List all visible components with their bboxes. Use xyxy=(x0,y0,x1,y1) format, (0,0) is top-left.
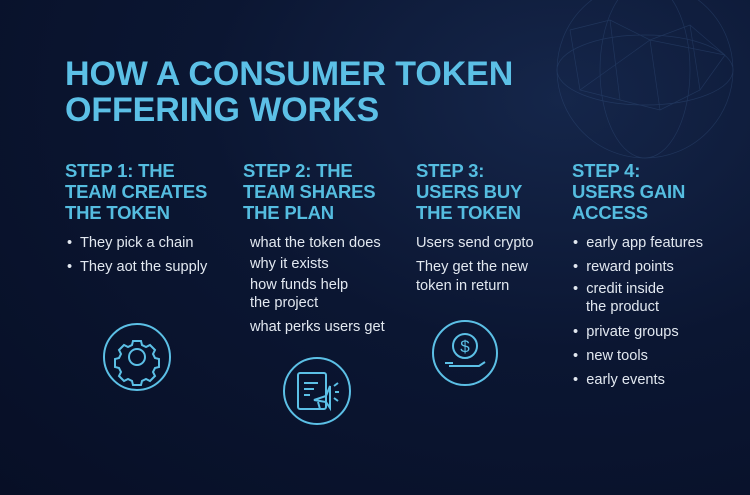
list: step 4: the product xyxy=(586,299,659,315)
list: step 2: why it exists xyxy=(250,256,329,272)
list: step 3: Users send crypto xyxy=(416,235,534,251)
heading: step 3: STEP 3: xyxy=(416,160,484,181)
heading: step 3: USERS BUY xyxy=(416,181,522,202)
heading: step 1: STEP 1: THE xyxy=(65,160,175,181)
heading: step 4: ACCESS xyxy=(572,202,648,223)
icon: gear xyxy=(103,323,171,391)
heading: step 2: STEP 2: THE xyxy=(243,160,353,181)
list: step 2 xyxy=(250,235,385,335)
title: HOW A CONSUMER TOKEN xyxy=(65,55,513,93)
list: step 1: • They pick a chain xyxy=(67,235,194,251)
list: step 1: • They aot the supply xyxy=(67,259,207,275)
list: step 4: • early events xyxy=(573,372,665,388)
background globe xyxy=(556,0,734,158)
list: step 4: • private groups xyxy=(573,324,679,340)
list: step 2: how funds help xyxy=(250,277,348,293)
list: step 4: • new tools xyxy=(573,348,648,364)
list: step 2: the project xyxy=(250,295,318,311)
heading: step 2 xyxy=(243,160,375,223)
list: step 3 xyxy=(416,235,534,294)
heading: step 2: THE PLAN xyxy=(243,202,334,223)
list: step 4: • early app features xyxy=(573,235,703,251)
heading: step 3 xyxy=(416,160,522,223)
list: step 3: They get the new xyxy=(416,259,528,275)
icon: dollar coin hand xyxy=(432,320,498,386)
heading: step 3: THE TOKEN xyxy=(416,202,521,223)
icon: announcement xyxy=(283,357,351,425)
list: step 1 xyxy=(67,235,208,275)
heading: step 2: TEAM SHARES xyxy=(243,181,375,202)
title xyxy=(65,55,513,129)
list: step 3: token in return xyxy=(416,278,509,294)
heading: step 1 xyxy=(65,160,207,223)
title: OFFERING WORKS xyxy=(65,91,379,129)
list: step 2: what the token does xyxy=(250,235,381,251)
heading: step 4: USERS GAIN xyxy=(572,181,685,202)
heading: step 4: STEP 4: xyxy=(572,160,640,181)
list: step 4 xyxy=(573,235,703,388)
heading: step 1: TEAM CREATES xyxy=(65,181,207,202)
icon: dollar coin hand: $ xyxy=(460,337,470,356)
heading: step 4 xyxy=(572,160,685,223)
list: step 4: • credit inside xyxy=(573,281,664,297)
list: step 4: • reward points xyxy=(573,259,674,275)
heading: step 1: THE TOKEN xyxy=(65,202,170,223)
list: step 2: what perks users get xyxy=(250,319,385,335)
